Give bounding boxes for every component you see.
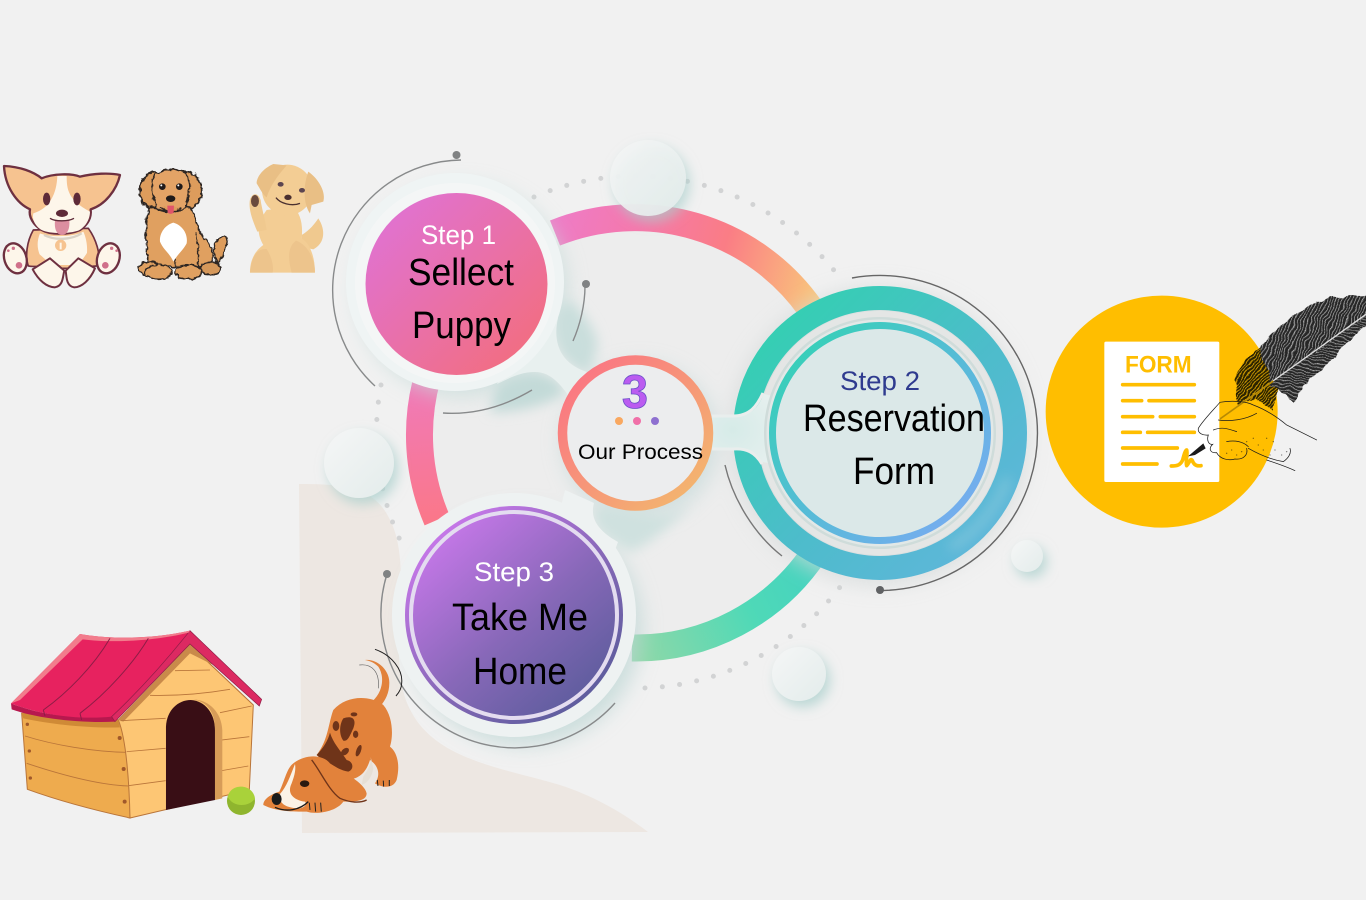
- step 1 disc: [366, 193, 548, 375]
- roof: [11, 631, 190, 719]
- form lines: [1123, 385, 1201, 466]
- step 3 title line 2: Home: [473, 651, 567, 693]
- connector highlight: [712, 393, 763, 464]
- inner disc: [427, 225, 843, 641]
- wag lines: [359, 649, 402, 696]
- tail: [365, 660, 389, 708]
- beige floor shape: [299, 484, 648, 833]
- writing hand: [1198, 401, 1317, 471]
- step 1 label: Step 1: [421, 220, 496, 250]
- numeral 3: 3: [622, 365, 648, 418]
- icon: dog house and ball: [11, 631, 262, 818]
- wall nails: [26, 723, 127, 804]
- step 2 outer band: [745, 298, 1015, 568]
- icon: puppy playing: [263, 649, 402, 813]
- thin orbit arcs with end dots: [333, 151, 1037, 748]
- doorway: [166, 700, 215, 810]
- three dots: [615, 417, 659, 425]
- coat patches: [317, 712, 363, 772]
- step 2 title line 1: Reservation: [803, 398, 985, 440]
- hind body: [317, 698, 398, 787]
- eye: [300, 780, 309, 787]
- soft shadows: [356, 184, 1030, 746]
- connector: step 3 to centre: [548, 490, 618, 590]
- connector: centre to step 2: [708, 394, 790, 466]
- connector shadow: step 3 to centre: [593, 505, 690, 552]
- dotted orbit: [376, 176, 840, 688]
- icon: golden waving puppy: [250, 164, 324, 273]
- step 1 title line 2: Puppy: [412, 305, 511, 347]
- form heading: FORM: [1125, 352, 1192, 379]
- centre node: [562, 360, 708, 506]
- quill feather: [1188, 296, 1366, 456]
- step 3 title line 1: Take Me: [452, 597, 588, 639]
- paper: [1104, 342, 1219, 482]
- step 2 label: Step 2: [840, 366, 920, 396]
- yellow disc: [1046, 296, 1278, 528]
- hand stipple: [1226, 438, 1287, 456]
- step 3 node: [392, 493, 636, 737]
- icon: form and quill: [1046, 296, 1366, 528]
- connector shadow: step 1 below: [490, 372, 566, 412]
- band highlight: [950, 478, 1008, 548]
- paws: [309, 780, 389, 812]
- connector shadow: step 1 right: [554, 300, 598, 375]
- tennis ball: [227, 787, 255, 815]
- connector: step 1 to centre: [497, 318, 590, 398]
- step 3 label: Step 3: [474, 557, 554, 587]
- floating bubbles: [324, 140, 1043, 701]
- icon: corgi puppy: [0, 166, 124, 287]
- step 2 inner ring and disc: [772, 326, 988, 540]
- step 3 disc: [405, 506, 623, 724]
- centre label: Our Process: [578, 441, 703, 464]
- step 2 node: [708, 298, 1015, 568]
- step 1 title line 1: Sellect: [408, 252, 514, 294]
- process diagram: [324, 140, 1043, 748]
- house front wall: [118, 645, 253, 818]
- step 2 halo: [758, 311, 1002, 555]
- icon: curly brown puppy: [139, 169, 227, 279]
- muzzle: [280, 764, 306, 808]
- step 2 title line 2: Form: [853, 451, 935, 493]
- main ring arcs: [419, 218, 815, 648]
- head: [263, 756, 367, 813]
- step 1 node: [346, 173, 564, 391]
